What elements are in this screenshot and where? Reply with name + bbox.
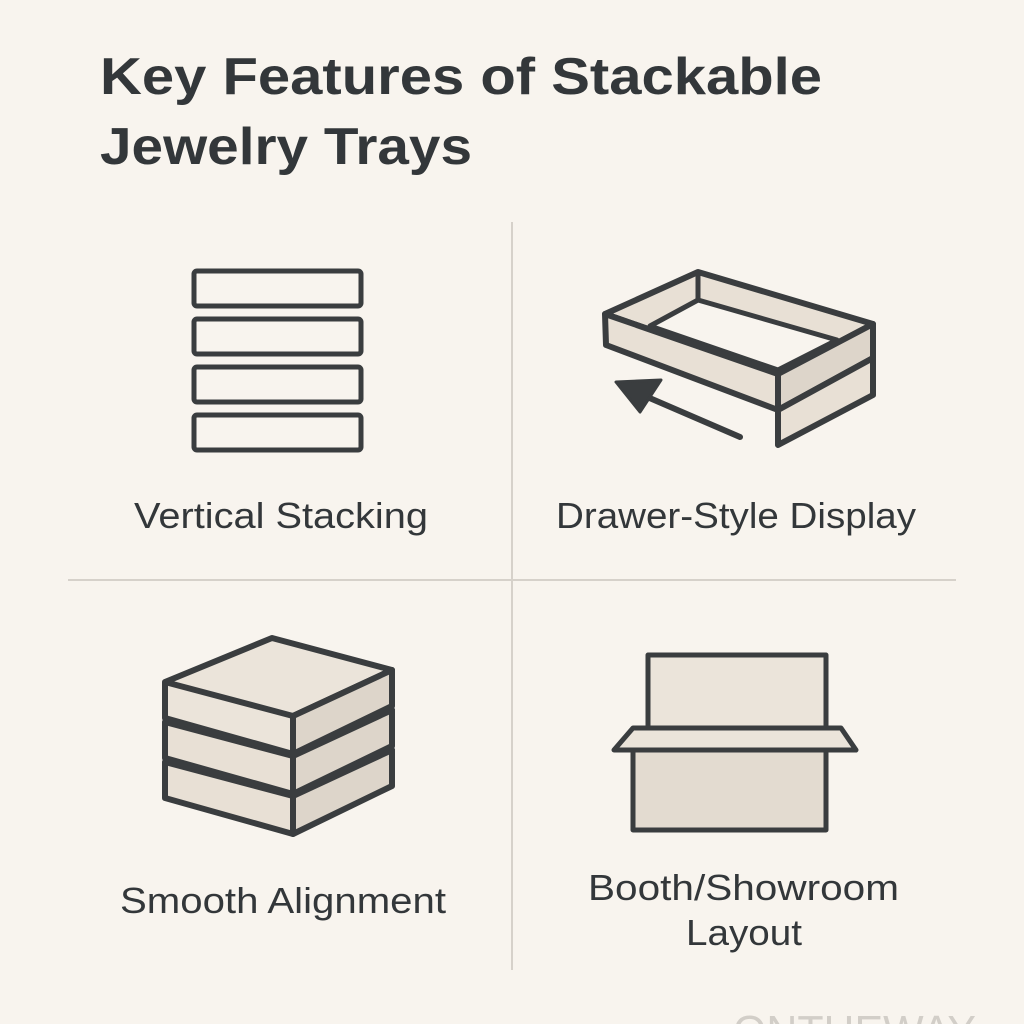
title: Key Features of Stackable	[100, 48, 822, 106]
label: vertical stacking: Vertical Stacking	[134, 495, 428, 536]
label: smooth alignment: Smooth Alignment	[120, 880, 446, 921]
label: booth: Booth/Showroom	[588, 867, 899, 908]
label: booth: Layout	[686, 912, 802, 953]
icon: booth	[614, 655, 856, 830]
icon: vertical stacking	[194, 271, 361, 450]
icon: smooth alignment	[165, 638, 392, 834]
label: booth	[588, 867, 899, 953]
label: drawer: Drawer-Style Display	[556, 495, 916, 536]
title	[100, 48, 822, 176]
icon: drawer	[605, 272, 873, 445]
title: Jewelry Trays	[100, 118, 472, 176]
